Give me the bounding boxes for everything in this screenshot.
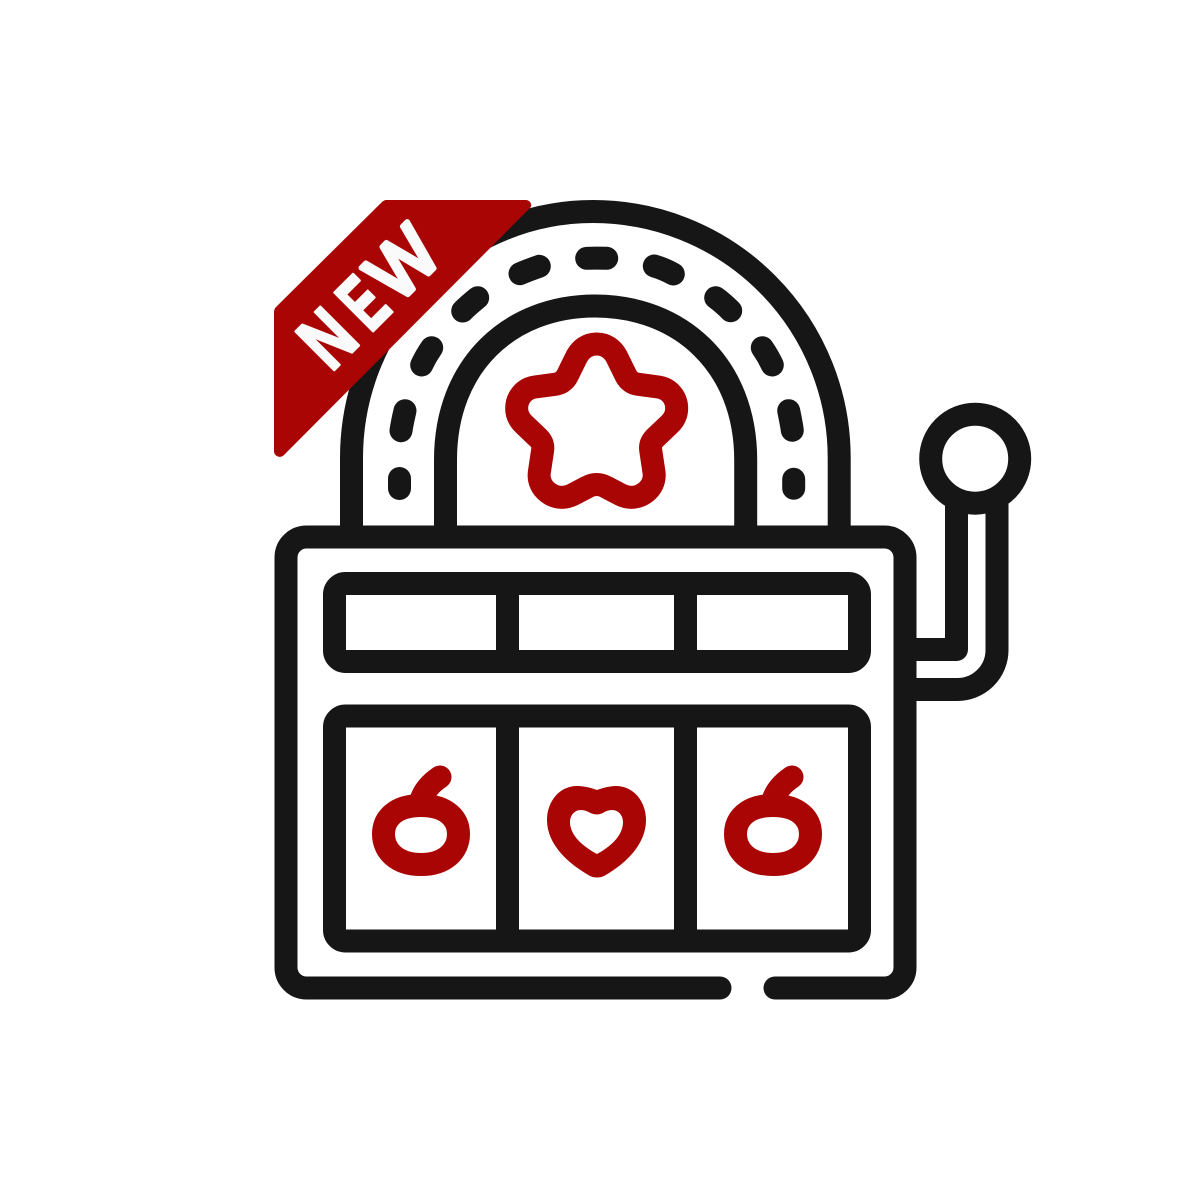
ribbon label: E bbox=[320, 260, 405, 345]
lower reels window bbox=[334, 716, 860, 941]
dashed light arc bbox=[400, 258, 794, 488]
lever bbox=[915, 414, 1020, 690]
heart fruit bbox=[547, 786, 646, 878]
upper reels window bbox=[334, 584, 860, 662]
left cherry bbox=[384, 777, 458, 864]
right cherry bbox=[736, 777, 810, 864]
dome top of machine bbox=[352, 212, 839, 530]
lever knob bbox=[931, 414, 1020, 503]
ribbon label: N bbox=[281, 292, 373, 385]
machine body bbox=[286, 537, 905, 988]
NEW ribbon bbox=[274, 200, 531, 457]
ribbon label bbox=[281, 208, 457, 385]
star icon bbox=[517, 344, 677, 497]
ribbon label: W bbox=[350, 210, 456, 316]
